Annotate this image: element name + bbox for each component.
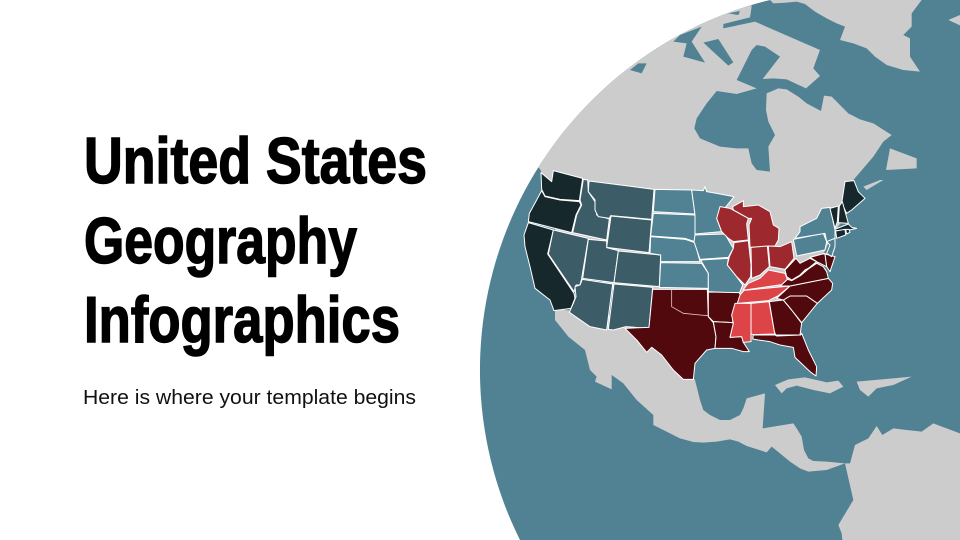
- Pacific states: [524, 171, 583, 311]
- landmass: Canada and northern US: [538, 0, 960, 303]
- title: Geography: [84, 204, 357, 277]
- Great Lakes states: [717, 201, 794, 285]
- Mountain states: [548, 179, 661, 330]
- East South Central states: [730, 270, 790, 342]
- title: [84, 124, 427, 356]
- map of United States: western states: [524, 171, 700, 330]
- Midwest plains states: [659, 187, 743, 293]
- New England states: [830, 181, 865, 238]
- title: Infographics: [84, 283, 400, 356]
- title: United States: [84, 124, 427, 197]
- globe ocean: [480, 0, 960, 540]
- Northern Plains states: [650, 189, 700, 262]
- Mid-Atlantic states: [793, 207, 835, 257]
- map of United States: central and eastern states: [625, 181, 865, 379]
- continents: [520, 0, 960, 540]
- globe illustration: [480, 0, 960, 540]
- landmass: Mexico, Central America and Caribbean: [555, 309, 960, 540]
- subtitle: Here is where your template begins: [83, 386, 416, 409]
- Southern states: [625, 253, 835, 379]
